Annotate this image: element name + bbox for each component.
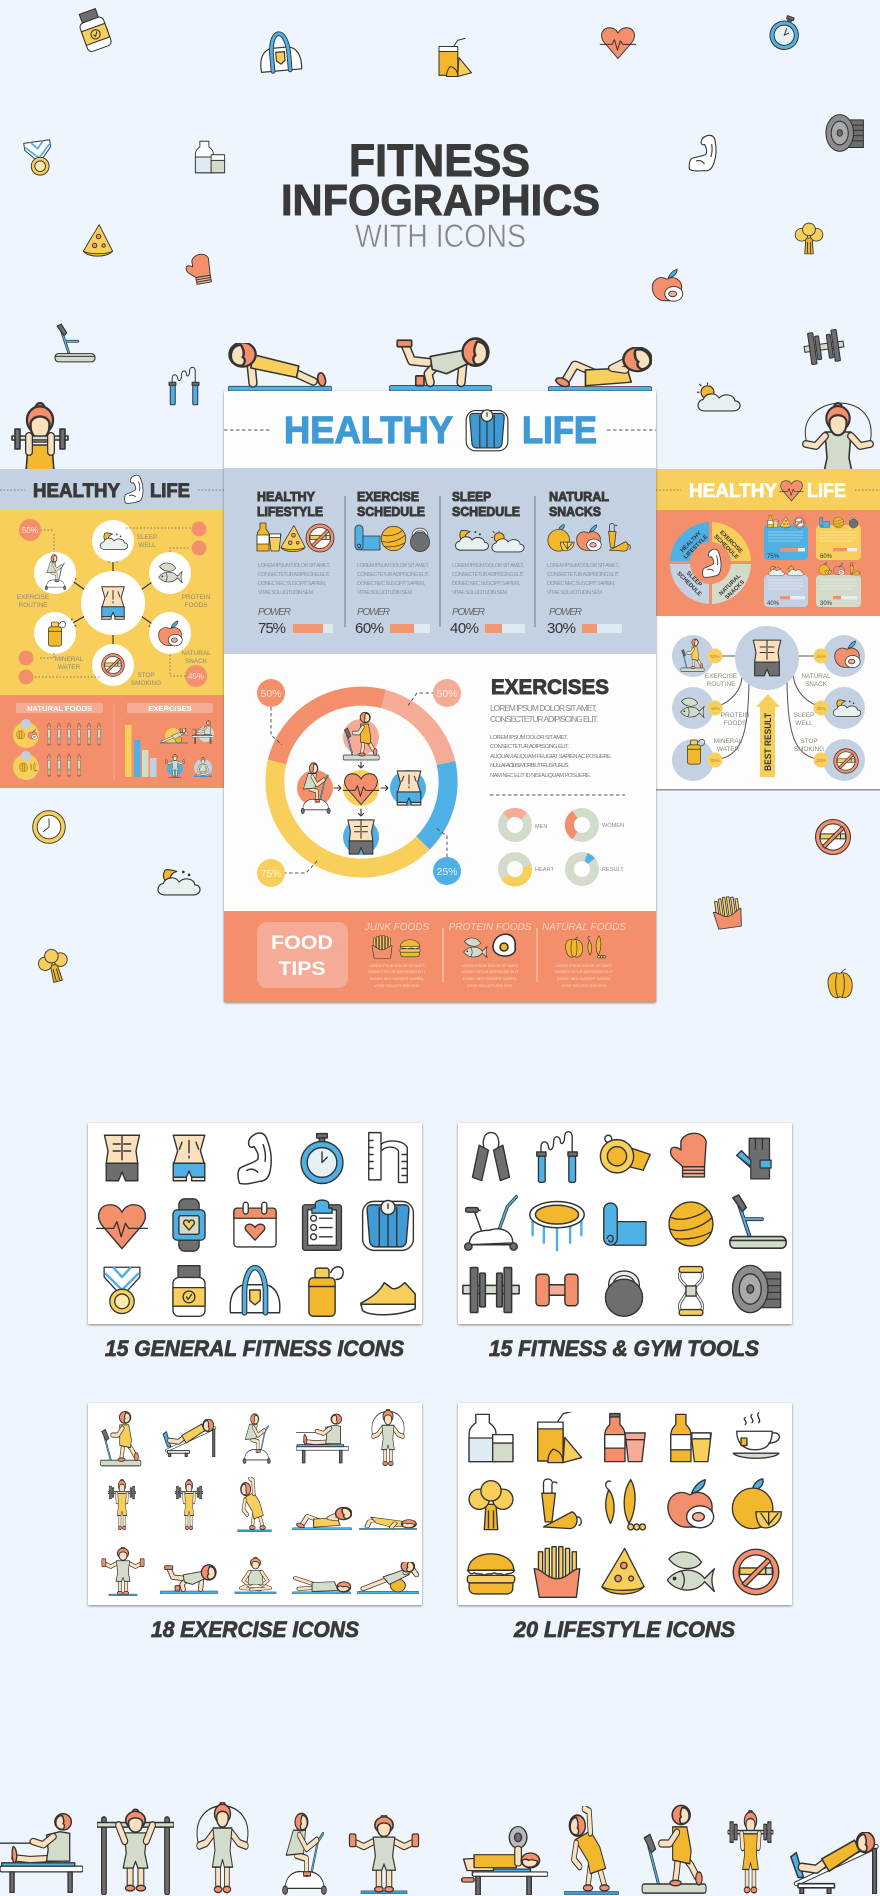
icon: pizza (83, 225, 113, 256)
wheel chart: SCHEDULE (675, 571, 702, 598)
icon: heart (600, 28, 636, 59)
column: exercise schedule: VITAE SOLLICITUDIN SEM. (357, 590, 413, 596)
column: healthy lifestyle (257, 489, 334, 637)
icon: fries (711, 895, 743, 930)
column: sleep schedule (450, 489, 525, 637)
donut charts: MEN (535, 824, 547, 830)
ring chart: 50% (260, 688, 282, 700)
icon: clock (33, 811, 65, 843)
title: INFOGRAPHICS (281, 176, 600, 225)
column: healthy lifestyle: LIFESTYLE (257, 504, 323, 519)
food tips badge (257, 922, 348, 988)
arrow: best result: BEST RESULT (763, 713, 773, 771)
icon: gym bag (258, 32, 302, 72)
column: natural snacks: CONSECTETUR ADIPISCING ELIT. (547, 572, 619, 578)
column: sleep schedule: SLEEP (452, 489, 491, 504)
wheel chart: LIFESTYLE (683, 534, 710, 560)
column: protein foods: DONEC NEC SUSCIPIT SAPIEN, (463, 977, 517, 981)
donut charts: RESULT (602, 867, 624, 873)
ring chart: 50% (436, 688, 458, 700)
result diagram: 30% (710, 758, 720, 763)
panel: left poster: NATURAL FOODS (27, 704, 92, 713)
scattered icons middle (33, 811, 852, 998)
scattered icons top (24, 7, 863, 411)
exercises text block (490, 676, 625, 795)
column: protein foods: VITAE SOLLICITUDIN SEM. (467, 984, 513, 988)
icon: scale (466, 410, 508, 451)
column: sleep schedule: DONEC NEC SUSCIPIT SAPIEN, (452, 581, 520, 587)
column: exercise schedule: SCHEDULE (357, 504, 425, 519)
panel: left poster (0, 469, 224, 788)
hub diagram: SMOKING (131, 680, 161, 687)
wheel chart: HEALTHY (680, 531, 703, 554)
result diagram: ROUTINE (707, 681, 735, 688)
column: healthy lifestyle: VITAE SOLLICITUDIN SEM. (258, 590, 314, 596)
figure: jump rope (197, 1802, 248, 1893)
wheel chart: SCHEDULE (712, 534, 739, 561)
donut charts: WOMEN (602, 823, 624, 829)
result diagram: MINERAL (714, 738, 743, 745)
panel: left poster: EXERCISES (148, 704, 192, 713)
column: natural snacks: VITAE SOLLICITUDIN SEM. (547, 590, 603, 596)
icon: muscle (688, 133, 719, 174)
hub diagram: MINERAL (55, 656, 84, 663)
wheel chart: NATURAL (718, 573, 742, 597)
figure: exercise bike (283, 1813, 326, 1894)
figure: treadmill run (642, 1805, 706, 1893)
arrow: best result (756, 694, 780, 777)
icon: juice (439, 38, 472, 76)
exercises text block: ALIQUAM ALIQUAM FEUGIAT SAPIEN AC POSUERE. (490, 754, 612, 760)
heading end: LIFE (807, 481, 846, 502)
exercises text block: LOREM IPSUM DOLOR SIT AMET, (490, 703, 597, 713)
result diagram: SNACK (805, 681, 828, 688)
caption: 15 GENERAL FITNESS ICONS (105, 1336, 404, 1361)
result diagram: EXERCISE (705, 673, 737, 680)
icon: heart (780, 481, 803, 501)
hub diagram: WELL (138, 542, 156, 549)
icon: supplement jar (76, 7, 112, 53)
result diagram: 45% (816, 654, 826, 659)
column: natural snacks: DONEC NEC SUSCIPIT SAPIEN, (547, 581, 616, 587)
hub diagram: FOODS (185, 602, 207, 609)
yellow area (0, 510, 224, 695)
hub diagram: WATER (58, 664, 81, 671)
column: healthy lifestyle: 75% (258, 620, 286, 637)
column: natural foods: LOREM IPSUM DOLOR SIT AMET, (556, 964, 613, 968)
column: natural foods (542, 922, 626, 988)
column: junk foods: VITAE SOLLICITUDIN SEM. (374, 984, 420, 988)
figures on top of main poster (228, 339, 655, 391)
hub diagram: 50% (22, 526, 38, 535)
people pictogram rows (13, 719, 101, 780)
result diagram: SMOKING (794, 746, 824, 753)
food tips band: FOOD (271, 933, 333, 954)
ring chart: 25% (436, 866, 458, 878)
column: junk foods: CONSECTETUR ADIPISCING ELIT. (368, 970, 426, 974)
wheel chart (670, 522, 751, 604)
exercises text block: CONSECTETUR ADIPISCING ELIT. (490, 714, 598, 724)
panel: main poster (224, 391, 656, 1002)
natural foods pill (16, 703, 103, 713)
column: exercise schedule: LOREM IPSUM DOLOR SIT AMET, (357, 563, 430, 569)
wheel chart: SNACKS (724, 579, 746, 601)
ring chart: 75% (260, 868, 282, 880)
column: sleep schedule: SCHEDULE (452, 504, 520, 519)
hub diagram: ROUTINE (19, 602, 47, 609)
hub diagram: 45% (188, 672, 204, 681)
header band (656, 469, 880, 510)
column: exercise schedule: DONEC NEC SUSCIPIT SAPIEN, (357, 581, 426, 587)
heading: HEALTHY (284, 410, 453, 452)
orange lower area (0, 695, 224, 788)
column: exercise schedule: POWER (357, 607, 390, 618)
header band (0, 469, 224, 510)
title (281, 135, 600, 254)
figure: pull-up (97, 1809, 174, 1895)
wheel chart: EXERCISE (718, 530, 743, 555)
result diagram: FOODS (724, 720, 746, 727)
column: exercise schedule: CONSECTETUR ADIPISCING ELIT. (357, 572, 429, 578)
hub diagram: SNACK (185, 658, 208, 665)
icon: muscle (125, 475, 143, 503)
column: natural foods: VITAE SOLLICITUDIN SEM. (561, 984, 607, 988)
food tips band: TIPS (278, 959, 326, 980)
column: healthy lifestyle: CONSECTETUR ADIPISCING ELIT. (258, 572, 330, 578)
exercises text block: CONSECTETUR ADIPISCING ELIT. (490, 744, 569, 750)
icon: treadmill (55, 324, 95, 362)
column: healthy lifestyle: POWER (258, 607, 291, 618)
hub diagram (17, 519, 211, 687)
figure: kneeling leg raise (389, 339, 492, 391)
panel: general fitness icons (88, 1123, 422, 1324)
icon: weight plates (826, 115, 863, 151)
column: sleep schedule: POWER (452, 607, 485, 618)
title: FITNESS (349, 135, 530, 186)
heading end: LIFE (150, 481, 190, 502)
column: protein foods: LOREM IPSUM DOLOR SIT AMET, (462, 964, 519, 968)
info cards: 30% (820, 601, 833, 607)
column: sleep schedule: VITAE SOLLICITUDIN SEM. (452, 590, 508, 596)
column: healthy lifestyle: DONEC NEC SUSCIPIT SAPIEN, (258, 581, 326, 587)
result diagram: 50% (710, 654, 720, 659)
result diagram: SLEEP (794, 712, 814, 719)
figure: woman with jump rope (805, 403, 871, 472)
figure: incline sit-up (791, 1832, 876, 1894)
result diagram: PROTEIN (721, 712, 750, 719)
heading: HEALTHY (689, 481, 777, 502)
column: protein foods (449, 922, 532, 988)
caption: 15 FITNESS & GYM TOOLS (489, 1336, 759, 1361)
figure: seated row (0, 1814, 83, 1892)
column: protein foods: PROTEIN FOODS (449, 922, 532, 933)
column: natural snacks: POWER (549, 607, 582, 618)
icon: boxing glove (184, 253, 213, 286)
hub diagram: NATURAL (181, 650, 211, 657)
hub diagram: SLEEP (137, 534, 157, 541)
result diagram: STOP (800, 738, 818, 745)
info cards: 75% (767, 554, 780, 560)
result diagram: WELL (795, 720, 813, 727)
column: natural snacks: SNACKS (549, 504, 601, 519)
inner diagram (297, 712, 426, 855)
hub diagram: EXERCISE (17, 594, 49, 601)
icon: jump rope (169, 367, 199, 405)
result diagram: WATER (717, 746, 740, 753)
exercises text block: NAM NEC ELIT ID NISI ALIQUAM POSUERE. (490, 773, 591, 779)
icon: medal (24, 140, 54, 177)
column: natural foods: DONEC NEC SUSCIPIT SAPIEN, (557, 977, 611, 981)
icon: stopwatch (766, 12, 804, 53)
icon: moon cloud (158, 867, 200, 895)
column: sleep schedule: CONSECTETUR ADIPISCING ELIT. (452, 572, 524, 578)
icon: pepper (828, 969, 852, 998)
result diagram (672, 626, 865, 781)
bar chart (125, 725, 156, 777)
panel: right poster (656, 469, 880, 790)
poster sheet (224, 391, 656, 1002)
donut charts: HEART (535, 867, 554, 873)
column: exercise schedule: EXERCISE (357, 489, 419, 504)
figure: arm raise (349, 1815, 419, 1894)
panel: lifestyle icons (458, 1403, 792, 1605)
column: natural foods: CONSECTETUR ADIPISCING ELIT. (555, 970, 613, 974)
column: exercise schedule: 60% (355, 620, 384, 637)
icon: apple (652, 269, 683, 301)
column: natural snacks: 30% (547, 620, 576, 637)
ring chart (257, 679, 461, 887)
icon: broccoli (36, 946, 72, 985)
exercises text block: LOREM IPSUM DOLOR SIT AMET, (490, 735, 568, 741)
column: junk foods: LOREM IPSUM DOLOR SIT AMET, (369, 964, 426, 968)
column: sleep schedule: 40% (450, 620, 479, 637)
title: WITH ICONS (355, 218, 526, 254)
column: natural snacks (547, 489, 630, 637)
column: healthy lifestyle: HEALTHY (257, 489, 315, 504)
exercise icons (160, 721, 214, 778)
heading end: LIFE (522, 410, 597, 452)
figure: bench press (462, 1827, 548, 1895)
icon: no smoking (816, 820, 850, 854)
panel: exercise icons (88, 1403, 422, 1605)
wheel chart: SLEEP (685, 570, 703, 588)
poster edge (656, 789, 880, 790)
figure: man lifting barbell (12, 403, 68, 472)
heading: HEALTHY (33, 481, 120, 502)
icon: dumbbell (802, 329, 846, 365)
caption: 18 EXERCISE ICONS (151, 1617, 359, 1642)
bottom row of exercise figures (0, 1802, 876, 1895)
figure: barbell curl (728, 1810, 773, 1893)
result diagram: NATURAL (801, 673, 831, 680)
panel: fitness and gym tools (458, 1123, 792, 1324)
exercises text block: EXERCISES (491, 676, 609, 699)
result diagram: 20% (816, 758, 826, 763)
icon: milk (195, 141, 225, 173)
schedule band (224, 468, 656, 654)
icon: broccoli (795, 223, 823, 254)
column: protein foods: CONSECTETUR ADIPISCING ELIT. (461, 970, 519, 974)
result diagram: 40% (710, 706, 720, 711)
column: exercise schedule (355, 489, 430, 637)
white lower area (656, 616, 880, 790)
food tips band (224, 911, 656, 1002)
figure: push-up (228, 342, 332, 391)
column: junk foods: JUNK FOODS (364, 922, 430, 933)
result diagram: 35% (816, 706, 826, 711)
column: junk foods: DONEC NEC SUSCIPIT SAPIEN, (370, 977, 424, 981)
hub diagram: STOP (137, 672, 155, 679)
exercises pill (127, 703, 213, 713)
column: natural foods: NATURAL FOODS (542, 922, 626, 933)
exercises text block: NULLA FACILISI. MORBI UT FELIS PURUS. (490, 763, 569, 769)
caption: 20 LIFESTYLE ICONS (513, 1617, 735, 1642)
donut charts (502, 812, 624, 882)
hub diagram: PROTEIN (182, 594, 211, 601)
figure: side stretch (564, 1809, 619, 1895)
column: sleep schedule: LOREM IPSUM DOLOR SIT AMET, (452, 563, 524, 569)
orange band (656, 510, 880, 616)
column: natural snacks: NATURAL (549, 489, 609, 504)
icon: cloud with sun (697, 383, 740, 411)
figure: crunch (548, 344, 655, 391)
column: junk foods (364, 922, 430, 988)
info cards (764, 515, 861, 607)
column: healthy lifestyle: LOREM IPSUM DOLOR SIT AMET, (258, 563, 330, 569)
info cards: 40% (767, 601, 780, 607)
column: natural snacks: LOREM IPSUM DOLOR SIT AMET, (547, 563, 620, 569)
info cards: 60% (820, 554, 833, 560)
